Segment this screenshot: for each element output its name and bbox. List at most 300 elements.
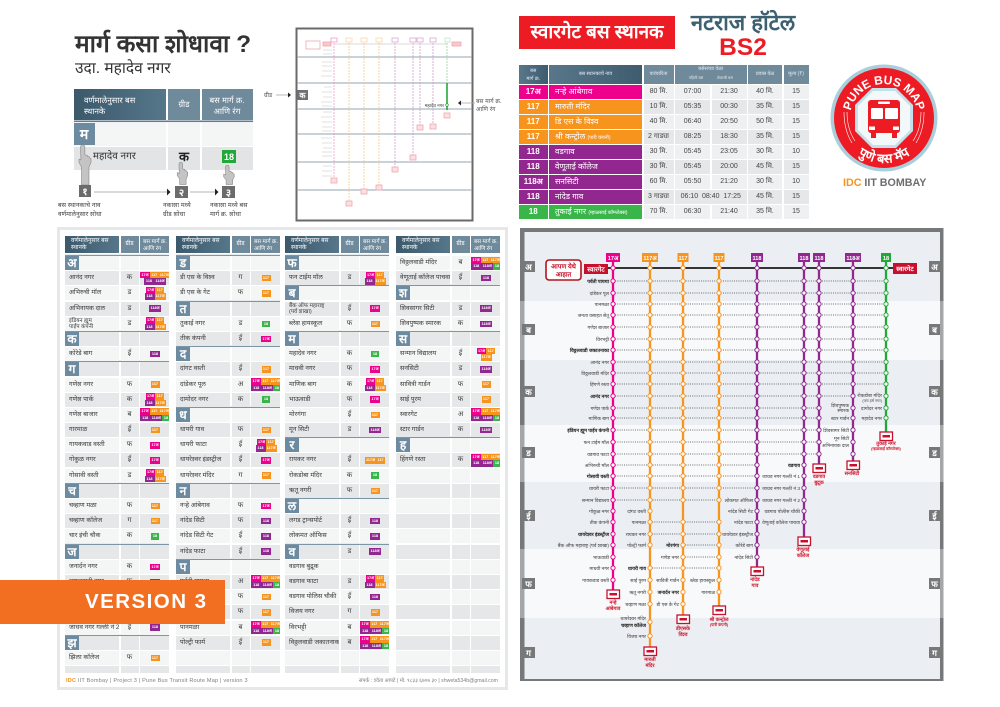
panel: how-to example table with pointing hands: वर्णमालेनुसार बस — [84, 95, 136, 106]
stop names left of route 17A: माणिक बाग — [588, 415, 609, 422]
row: 117 Maruti temple: 00:30 — [720, 103, 738, 110]
stop names left of route 17A: विठ्ठलवाडी मंदिर — [581, 370, 610, 377]
index column 4: स्टार गार्डन — [400, 426, 424, 433]
stop names left of routes 117: डी एस के गेट — [655, 601, 680, 608]
index column 3: 117 — [372, 610, 378, 614]
index column 2: 17अ — [252, 622, 260, 626]
index column 1: फ — [127, 380, 132, 388]
index column 2: ई — [239, 456, 242, 463]
row: 118A Suncity: सनसिटी — [555, 177, 578, 186]
stop names left of route 17A: अभिरुची मॉल — [585, 462, 610, 469]
index column 4: हिंगणे रस्ता — [400, 456, 425, 463]
index column 3: फन टाईम मॉल — [289, 274, 323, 281]
index column 1 — [65, 236, 169, 673]
index column 1: 117 — [151, 273, 157, 277]
stop names left of route 17A: तीक कंपनी — [590, 519, 610, 526]
row: 18 Tukai Nagar: 35 मि. — [756, 208, 774, 215]
stop names left of routes 118A and 18: स्टार गार्डन — [831, 415, 849, 422]
row: 118A Suncity: 05:50 — [684, 178, 701, 185]
stop names left of route 17A: इंडियन ह्यूम पाईप कंपनी — [566, 427, 610, 435]
index column 2: 118 — [253, 583, 259, 587]
index column 2: 17अ — [252, 379, 260, 383]
row: 18 Tukai Nagar: 70 मि. — [650, 208, 667, 215]
index column 2: डी एस के विश्व — [180, 274, 215, 281]
index column 1: अभिरुची मॉल — [69, 289, 101, 296]
stop names left of route 118: जाधव नगर गल्ली नं 1 — [762, 473, 800, 480]
index column 2: 117 — [263, 291, 269, 295]
index column 2: 117 — [262, 622, 268, 626]
stop names left of route 17A: आनंद नगर — [590, 393, 610, 400]
row: 117 DSK Vishwa: 20:50 — [720, 118, 738, 125]
row: 117 Shri Control: 117 — [527, 132, 540, 141]
index column 3: ई — [348, 305, 351, 312]
stop names left of route 117A: रायकर नगर — [626, 533, 647, 538]
stop names left of route 17A: दांडेकर पूल — [590, 290, 610, 297]
index column 4: 18 — [495, 461, 499, 465]
index column 3: 117 — [377, 576, 383, 580]
row: 17A: 40 मि. — [756, 88, 774, 95]
index column 2: दामोदर नगर — [180, 396, 208, 403]
route 117A line — [649, 262, 651, 647]
banner: bus stand name: स्वारगेट बस स्थानक — [531, 21, 663, 42]
index column 1: 118 — [146, 279, 152, 283]
row: 118A Suncity — [519, 175, 809, 189]
index column 3: माणिक बाग — [289, 380, 316, 388]
index column 2: नांदेड फाटा — [180, 548, 205, 555]
index column 4: 117 — [483, 397, 489, 401]
stop names left of routes 117: मोरगंगा — [665, 542, 680, 549]
index column 3: ड — [348, 274, 351, 281]
index column 3: 118 — [372, 534, 378, 538]
terminus markers with names: श्री कन्ट्रोल — [709, 616, 729, 623]
index column 4: फ — [458, 396, 463, 403]
index column 3: 17अ — [371, 397, 379, 401]
stop names left of route 118: वेणूताई कॉलेज पाचवा — [762, 519, 801, 526]
route 118 line to Vadgaon — [818, 262, 820, 464]
grid letters — [522, 261, 940, 658]
index column 4: क — [458, 426, 463, 433]
index column 2: 17अ — [262, 458, 270, 462]
dotted stop connectors — [613, 281, 886, 568]
index column 2: 17अ — [252, 576, 260, 580]
stop names left of route 17A: बैंक ऑफ महाराष्ट्र (पर्व शाखा) — [557, 542, 609, 549]
terminus markers with names: विश्व — [677, 631, 688, 638]
index column 2: 117 — [263, 428, 269, 432]
banner: version 3 — [0, 580, 225, 624]
row: 118 Venutai College: 15 — [792, 163, 800, 170]
index column 3: 17अ — [367, 576, 374, 580]
index column 3: वडगाव पोलिस चौकी — [289, 593, 336, 600]
index column 1: 17अ — [147, 288, 154, 292]
route 117 line to DSK Vishwa — [682, 262, 684, 615]
index column 3: 117 — [372, 413, 378, 417]
timetable header row: पहिली बस शेवटची बस — [689, 76, 733, 80]
index column 1: 17अ — [147, 318, 154, 322]
row: 118 Vadgaon: 118 — [527, 147, 540, 156]
index column 3: 117 — [371, 622, 377, 626]
panel: faded mini route map example: महादेव नगर — [425, 102, 444, 108]
index column 3: ई — [348, 532, 351, 539]
index column 2: प — [180, 560, 186, 574]
timetable header row: मूल्य (₹) — [788, 71, 804, 77]
stop names left of route 117A: पोल्ट्री फार्म — [627, 542, 647, 549]
index column 1: गणेश नगर — [69, 380, 93, 388]
column header: आणि रंग — [363, 246, 381, 252]
row: 118 Vadgaon: 05:45 — [684, 148, 701, 155]
index column 2: 117 — [263, 276, 269, 280]
row: 117 Maruti temple — [519, 100, 809, 114]
row: 118 Venutai College: वेणूताई कॉलेज — [555, 162, 598, 171]
row: 118A Suncity: 21:20 — [720, 178, 738, 185]
row: 117 DSK Vishwa: 15 — [792, 118, 800, 125]
index column 1: 17अ — [147, 470, 154, 474]
stop names left of route 118: जाधव नगर गल्ली नं 3 — [762, 485, 800, 492]
index column 2: ग — [239, 274, 242, 281]
index column 2: ड — [239, 320, 242, 327]
index column 1: 118 — [146, 401, 153, 405]
stop names left of route 117A: साई पुरम — [630, 577, 646, 584]
index column 1: फ — [127, 502, 132, 509]
grid letters: क — [524, 387, 532, 397]
row: 117 Maruti temple: 35 मि. — [756, 103, 774, 110]
banner: bus stand name — [519, 16, 675, 49]
stop names left of route 117A — [620, 508, 647, 640]
index column 4: 117 — [482, 455, 488, 459]
stop names left of routes 117: गारमाळ — [701, 591, 715, 596]
stop names left of route 118: नांदेड सिटी — [734, 554, 754, 561]
panel: faded mini route map example: क — [298, 91, 306, 100]
stop names left of route 17A: गणेश बाजार — [588, 324, 610, 331]
index column 3: बैंक ऑफ महाराष्ट्र — [289, 303, 324, 309]
index column 1: 17अ — [147, 394, 154, 398]
row: 117 Shri Control: 35 मि. — [756, 133, 774, 140]
terminus markers with names: (म्हाळसाई कॉम्प्लेक्स) — [871, 446, 902, 451]
row: 17A: 17अ — [526, 87, 541, 96]
index column 1: 117 — [157, 394, 163, 398]
index column 1: 17अ — [141, 409, 149, 413]
index column 3: वडगाव फाटा — [289, 578, 318, 585]
grid letters: ब — [525, 325, 532, 335]
index column 2: तुकाई नगर — [180, 320, 205, 327]
index column 4: 118 — [473, 264, 479, 268]
index column 4: क — [458, 456, 463, 463]
index column 3: रायकर नगर — [289, 456, 316, 463]
index column 3: ई — [348, 411, 351, 418]
row: 117 DSK Vishwa: 50 मि. — [756, 118, 774, 125]
index column 1: 117अ — [160, 409, 169, 413]
column header — [285, 236, 389, 253]
index column 2: फ — [238, 426, 243, 433]
panel: how-to example table with pointing hands: नकाशा मध्ये — [163, 201, 191, 209]
index column 4: सनसिटी — [400, 365, 419, 372]
index column 1: 118 — [146, 294, 153, 298]
terminus markers with names: तुकाई नगर — [875, 440, 897, 447]
index column 3: 118 — [366, 583, 373, 587]
index column 4: 118अ — [481, 428, 491, 432]
index column 2: धायरी गाव — [180, 426, 204, 433]
route number tags: 17अ — [608, 256, 619, 262]
index column 2: ई — [239, 441, 242, 448]
stop names left of route 17A: विठ्ठलवाडी जकातनाका — [569, 347, 610, 354]
timetable header row: मार्ग क्र. — [526, 76, 540, 82]
index column 1: ई — [128, 426, 131, 433]
index column 4: 117अ — [491, 455, 500, 459]
index column 1: 117 — [152, 504, 158, 508]
timetable header row: प्रवास वेळ — [756, 71, 774, 77]
row: 117 Shri Control: 2 गाड्या — [648, 133, 669, 140]
index column 4: 117 — [488, 349, 494, 353]
index column 1: 17अ — [151, 443, 159, 447]
terminus markers with names: आंबेगाव — [606, 605, 621, 612]
index column 1: क — [67, 332, 77, 346]
index column 2: ई — [239, 548, 242, 555]
stop names left of route 17A: हिंगणे रस्ता — [590, 381, 610, 388]
panel: how-to example table with pointing hands: बस स्थानकाचे नाव — [58, 201, 101, 209]
stop names left of route 118: जाधव नगर गल्ली नं 2 — [762, 497, 800, 504]
row: 118 Vadgaon — [519, 145, 809, 159]
index column 4: 117 — [482, 258, 488, 262]
index column 1: 117अ — [155, 325, 165, 329]
stop names left of route 117A: ऋतू नगरी — [629, 589, 647, 596]
index column 3: ड — [348, 578, 351, 585]
stop names left of routes 118A and 18: (जय हर्ष नगर) — [862, 398, 883, 403]
index column 2 — [176, 236, 280, 673]
index column 3: क — [347, 350, 352, 357]
index column 1: झिला कॉलेज — [69, 654, 99, 661]
index column 2: 117अ — [271, 576, 280, 580]
index column 1: 17अ — [151, 458, 159, 462]
index column 4: 17अ — [472, 409, 480, 413]
index column 1: जनार्दन नगर — [69, 563, 97, 570]
column header: वर्णमालेनुसार बस — [71, 238, 109, 244]
row: 17A: 21:30 — [720, 88, 738, 95]
column header: ग्रीड — [236, 241, 245, 247]
panel: how-to example table with pointing hands: ग्रीड शोधा — [163, 210, 185, 218]
index column 4: 117 — [482, 409, 488, 413]
terminus markers with names: गाव — [751, 583, 759, 589]
stop names left of routes 118A and 18: शिवसागर सिटी — [823, 427, 850, 434]
index column 3: 118 — [372, 519, 378, 523]
row: 18 Tukai Nagar: 15 — [792, 208, 800, 215]
index column 2: दांडेकर पूल — [180, 380, 206, 388]
stop names left of route 118: धायरेश्वर इंडस्ट्रीज — [722, 531, 753, 538]
terminus markers with names: कॉलेज — [796, 552, 809, 559]
index column 3: ब्लेश हायस्कूल — [289, 320, 322, 327]
timetable header row: बस स्थानकाचे नाव — [579, 71, 612, 77]
index column 4: 117अ — [491, 258, 500, 262]
stop names left of route 118 — [722, 463, 801, 561]
index column 1: चार इंची चौक — [69, 532, 100, 539]
row: 118 Vadgaon: 30 मि. — [756, 148, 774, 155]
terminus markers with names: (पारी कंपनी) — [710, 622, 729, 627]
route 17A line — [612, 262, 614, 590]
row: 118 Venutai College: 45 मि. — [756, 163, 774, 170]
index column 1: 117 — [157, 470, 163, 474]
index column 1: 17अ — [151, 564, 159, 568]
index column 2: 118अ — [263, 628, 272, 632]
index column 2: 18 — [275, 628, 279, 632]
index column 1: 118 — [152, 625, 158, 629]
index column 2: 17अ — [262, 504, 270, 508]
panel: faded mini route map example: आणि रंग — [476, 105, 496, 113]
index column 4: 117अ — [481, 355, 491, 359]
row: 118 Venutai College: 118 — [527, 162, 540, 171]
panel: how-to example table with pointing hands — [58, 89, 253, 218]
index column 1: फ — [127, 654, 132, 661]
index column 2: 117 — [263, 595, 269, 599]
route 118A line — [852, 262, 854, 461]
column header: स्थानके — [291, 245, 307, 251]
index column 1: ड — [128, 320, 131, 327]
route number tags: 118 — [752, 256, 762, 262]
index column 4: सावित्री गार्डन — [400, 380, 430, 388]
stop names left of route 17A: गणेश पार्क — [591, 405, 609, 412]
row: 117 Shri Control — [519, 130, 809, 144]
index column 2: अ — [238, 578, 243, 585]
index column 4: 117 — [483, 382, 489, 386]
row: 118 Venutai College — [519, 160, 809, 174]
index column 3: 117अ — [380, 637, 389, 641]
row: 117 DSK Vishwa: डि एस के विश्व — [555, 117, 598, 126]
stop names left of route 17A: पर्वती पायथा — [586, 278, 610, 285]
route map: all routes from Swargate — [520, 228, 944, 681]
index column 3: व — [289, 545, 295, 559]
panel: alphabetical stop index background — [57, 227, 508, 690]
index column 3: 118 — [366, 279, 373, 283]
index column 2: फ — [238, 593, 243, 600]
index column 3: 117 — [377, 273, 383, 277]
index column 1: 117अ — [155, 401, 165, 405]
stop names left of route 117A: चव्हाण कॉलेज — [620, 622, 646, 629]
index column 2: 117अ — [266, 446, 276, 450]
index column 3: क — [347, 380, 352, 388]
column header: बस मार्ग क्र. — [363, 238, 387, 244]
row: 117 DSK Vishwa: 117 — [527, 117, 540, 126]
index column 3: 118अ — [372, 644, 381, 648]
panel: how-to example table with pointing hands: ग्रीड — [178, 99, 190, 109]
row: 118A Suncity: 10 — [792, 178, 800, 185]
index column 1: जाधव नगर गल्ली नं 2 — [69, 624, 119, 630]
index column 1: क — [127, 396, 132, 403]
index column 3: ई — [348, 593, 351, 600]
index column 3: म — [288, 332, 296, 346]
row: 118 Nanded village: 118 — [527, 192, 540, 201]
index column 3: र — [290, 438, 294, 452]
index column 2: 117 — [268, 440, 274, 444]
index column 4: 118 — [473, 416, 479, 420]
index column 1: चव्हाण कॉलेज — [69, 517, 102, 524]
index column 1: 18 — [153, 534, 157, 538]
index column 4: 118अ — [483, 416, 492, 420]
index column 2: धायरेश्वर इंडस्ट्रीज — [180, 456, 221, 463]
callout: you are here: आपण येथे — [551, 262, 577, 270]
panel: how-to example table with pointing hands: ३ — [226, 188, 231, 199]
index column 1: 118अ — [155, 279, 165, 283]
stop names left of routes 118A and 18: रोकडोबा मंदिर — [857, 392, 883, 399]
index column 1: 118 — [146, 477, 153, 481]
grid letters: ई — [931, 511, 938, 521]
index column 2: 118 — [263, 519, 269, 523]
terminus markers with names: नऱ्हे — [608, 599, 617, 606]
index column 2: द — [180, 347, 186, 361]
index column 1: गोसावी वस्ती — [69, 472, 99, 479]
index column 1: च — [68, 484, 76, 498]
row: 118 Nanded village: 15 — [792, 193, 800, 200]
stop names left of route 118: वडगाव पोलीस चौकी — [764, 508, 801, 515]
stop names left of route 117A: धायरी गाव — [628, 565, 646, 572]
index column 1: चव्हाण मळा — [69, 502, 97, 509]
row: 117 Shri Control: 15 — [792, 133, 800, 140]
index column 1: 17अ — [151, 580, 159, 584]
row: 118 Nanded village: 3 गाड्या — [648, 193, 669, 200]
index column 4: 18 — [495, 416, 499, 420]
panel: faded mini route map example: ग्रीड — [264, 91, 273, 99]
stop names left of route 17A: सन्मान विद्यालय — [582, 497, 609, 504]
index column 2: पाटील वस्ती — [180, 608, 208, 615]
index column 1: ग — [128, 517, 131, 524]
stop names left of routes 118A and 18: मून सिटी — [834, 435, 850, 442]
index column 4: 18 — [495, 264, 499, 268]
index column 2: फ — [238, 502, 243, 509]
panel: how-to example table with pointing hands: स्थानके — [84, 106, 106, 116]
index column 3: 117 — [377, 458, 384, 462]
index column 3: 117अ — [380, 622, 389, 626]
index column 1: कोरेडे बाग — [69, 350, 92, 357]
stop names left of routes 118A and 18: शिवपुष्पक — [831, 402, 849, 409]
index column 2: 118 — [263, 549, 269, 553]
route number tags: 118 — [814, 256, 824, 262]
index column 4: 118 — [483, 276, 489, 280]
index column 2: 18 — [275, 386, 279, 390]
stop names left of route 17A: भाऊवाडी — [593, 554, 610, 561]
grid letters: ई — [525, 511, 532, 521]
index column 2: 117 — [263, 367, 269, 371]
index column 4: क — [458, 320, 463, 327]
row: 118 Vadgaon: वडगाव — [555, 147, 575, 156]
stop names left of route 17A: माधवी नगर — [589, 565, 610, 572]
row: 117 Shri Control: 18:30 — [720, 133, 738, 140]
stop names left of route 17A: गायकवाड वस्ती — [582, 577, 610, 584]
row: 17A: नऱ्हे आंबेगाव — [555, 87, 592, 96]
timetable header row — [519, 65, 809, 84]
index column 2: पानमळा — [180, 624, 199, 630]
route 118 line to Nanded village — [756, 262, 758, 567]
stop names left of routes 117 — [655, 542, 716, 608]
grid letters: फ — [524, 579, 532, 589]
panel: how-to example table with pointing hands: क — [178, 149, 190, 164]
stop names left of route 17A: गोसावी वस्ती — [586, 473, 610, 480]
index column 3: 118अ — [372, 628, 381, 632]
column header: स्थानके — [402, 245, 418, 251]
index column 3: विरभट्टी — [289, 624, 306, 630]
index column 3: विजय नगर — [289, 608, 314, 615]
row: 118 Vadgaon: 23:05 — [720, 148, 738, 155]
index column 3: फ — [347, 365, 352, 372]
panel: how-to example table with pointing hands: मार्ग क्र. शोधा — [210, 210, 241, 218]
grid letters: ग — [525, 648, 532, 658]
column header: आणि रंग — [474, 246, 492, 252]
column header: वर्णमालेनुसार बस — [182, 238, 220, 244]
terminus markers with names: बुद्रूक — [813, 480, 825, 486]
index column 1: पाईप कंपनी — [69, 324, 93, 330]
timetable header row: बस — [530, 68, 536, 74]
row: 118 Vadgaon: 10 — [792, 148, 800, 155]
logo: Pune Bus Map roundel — [830, 64, 938, 172]
row: 118A Suncity: 60 मि. — [650, 178, 667, 185]
index column 2: 17अ — [258, 440, 265, 444]
terminus markers with names: मंदिर — [644, 662, 655, 669]
footer credit left: IDC IIT Bombay | Project 3 | Pune Bus Transit Route Map | version 3 — [66, 678, 248, 684]
